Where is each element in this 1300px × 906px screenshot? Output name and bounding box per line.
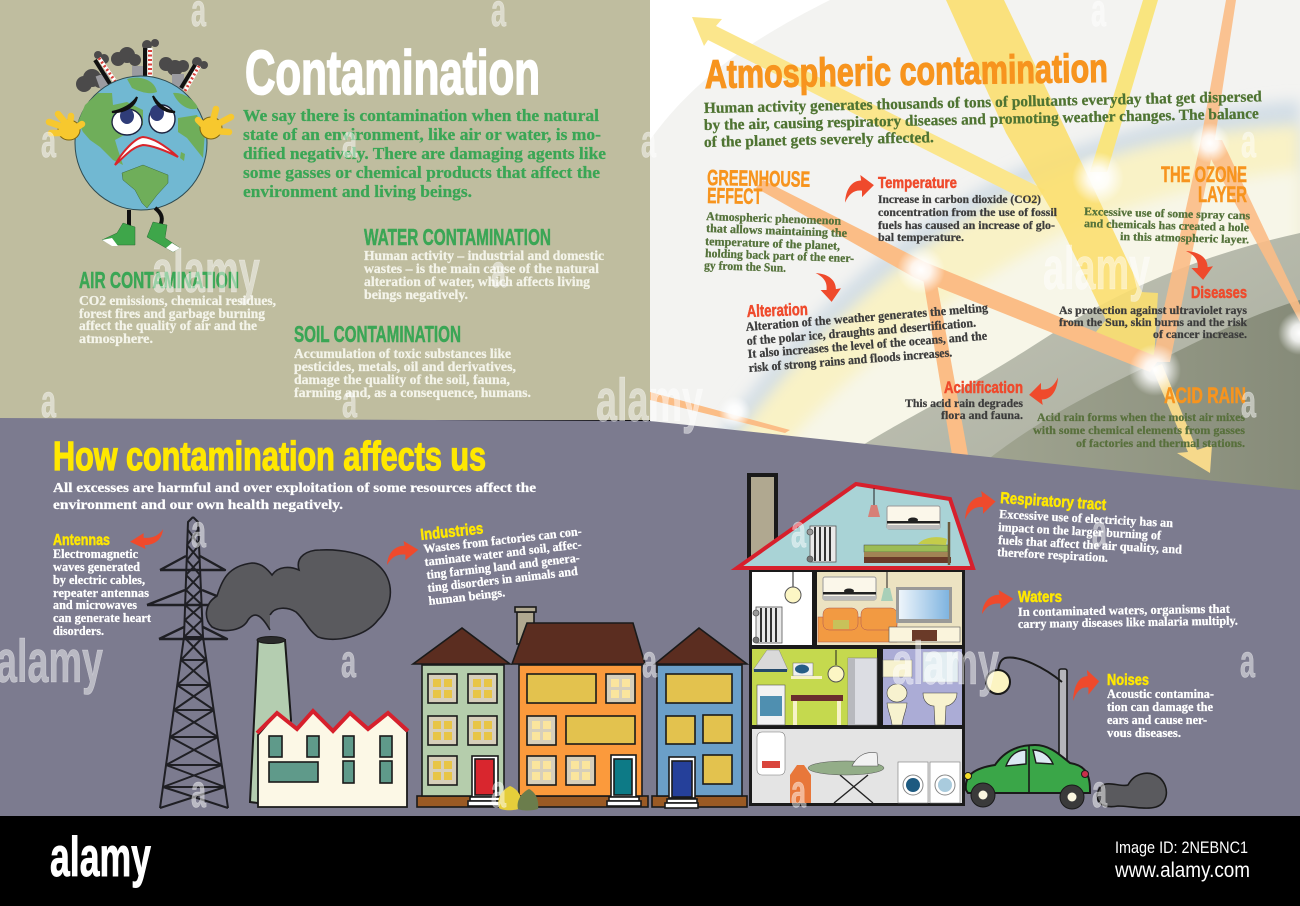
section: soil contamination: farming and, as a consequence, humans.	[294, 385, 531, 400]
section: acid rain: of factories and thermal stations.	[1076, 436, 1245, 450]
watermark: alamy stamps: a	[342, 375, 357, 427]
arrow: acid rain to acidification	[1029, 377, 1058, 405]
text block: how contamination intro: environment and our own health negatively.	[53, 498, 343, 513]
section: industries: human beings.	[428, 585, 506, 608]
logo: alamy: alamy	[50, 825, 151, 888]
icon: factory	[250, 636, 408, 807]
watermark: alamy stamps: a	[1240, 635, 1255, 687]
section: the ozone layer: and chemicals has created a hole	[1084, 218, 1249, 234]
watermark: alamy stamps: a	[41, 375, 56, 427]
section: antennas: by electric cables,	[53, 573, 145, 587]
watermark: alamy stamps: alamy	[1043, 235, 1150, 302]
arrow: waters	[982, 590, 1013, 614]
section: alteration	[745, 300, 989, 375]
arrow: industries	[387, 541, 418, 565]
section: noises: tion can damage the	[1107, 700, 1213, 714]
section: soil contamination: pesticides, metals, oil and derivatives,	[294, 359, 516, 374]
section: soil contamination: damage the quality of the soil, fauna,	[294, 372, 510, 387]
title: Contamination: Contamination	[245, 39, 540, 108]
icon: row of houses	[413, 607, 747, 808]
text block: how contamination intro: All excesses are harmful and over exploitation of some resources affect the	[53, 481, 536, 496]
section: greenhouse effect: that allows maintaining the	[706, 221, 848, 240]
section: respiratory tract: fuels that affect the air quality, and	[998, 533, 1182, 557]
image id and url	[1114, 838, 1250, 882]
section: industries: Industries	[420, 520, 484, 544]
section: antennas: Antennas	[53, 532, 110, 549]
section: the ozone layer: in this atmospheric layer.	[1120, 231, 1249, 246]
watermark: alamy stamps: a	[491, 765, 506, 817]
watermark: alamy stamps: a	[791, 505, 806, 557]
section: soil contamination	[294, 321, 531, 400]
section: industries: Wastes from factories can con-	[423, 524, 582, 556]
section: diseases: from the Sun, skin burns and the risk	[1059, 315, 1247, 329]
text block: atmospheric intro: by the air, causing respiratory diseases and promoting weather changes. The balance	[704, 105, 1259, 134]
section: the ozone layer: Excessive use of some spray cans	[1084, 206, 1251, 222]
text block: contamination intro: some gasses or chemical products that affect the	[243, 163, 600, 182]
section: greenhouse effect: gy from the Sun.	[704, 258, 786, 275]
section: water contamination: beings negatively.	[364, 287, 468, 302]
section: waters: Waters	[1018, 589, 1062, 606]
watermark: alamy stamps: alamy	[0, 628, 103, 695]
section: air contamination: atmosphere.	[79, 331, 153, 346]
section: waters: In contaminated waters, organisms that	[1018, 602, 1231, 619]
section: water contamination: Human activity – industrial and domestic	[364, 248, 604, 263]
section: water contamination: alteration of water, which affects living	[364, 274, 590, 289]
icon: car with exhaust	[964, 745, 1166, 809]
watermark: alamy stamps: a	[1241, 375, 1256, 427]
watermark: alamy stamps: a	[341, 635, 356, 687]
section: greenhouse effect: temperature of the planet,	[705, 234, 840, 253]
section: acid rain: with some chemical elements from gasses	[1033, 423, 1245, 437]
section: respiratory tract	[997, 490, 1182, 565]
section: acidification: flora and fauna.	[941, 408, 1023, 422]
section: greenhouse effect: holding back part of the ener-	[705, 246, 854, 265]
text block: contamination intro: environment and living beings.	[243, 182, 472, 201]
section: air contamination: affect the quality of air and the	[79, 318, 257, 333]
icon: sad earth character	[49, 39, 231, 252]
section: respiratory tract: Respiratory tract	[1000, 490, 1107, 514]
text block: contamination intro: dified negatively. There are damaging agents like	[243, 144, 606, 163]
section: alteration: risk of strong rains and floods increases.	[748, 345, 953, 375]
section: alteration: It also increases the level of the oceans, and the	[747, 329, 988, 361]
section: water contamination	[364, 224, 604, 302]
section: air contamination: forest fires and garbage burning	[79, 306, 265, 321]
basement appliances	[757, 732, 960, 803]
section: noises: vous diseases.	[1107, 726, 1181, 740]
section: soil contamination: SOIL CONTAMINATION	[294, 321, 461, 347]
watermark: alamy stamps: alamy	[892, 630, 999, 697]
text block: contamination intro: We say there is contamination when the natural	[243, 106, 599, 125]
watermark: alamy stamps: a	[1092, 765, 1107, 817]
section: the ozone layer: THE OZONE	[1161, 162, 1247, 187]
section: temperature: Temperature	[878, 175, 957, 192]
section: alteration: Alteration of the weather generates the melting	[745, 300, 989, 334]
section: greenhouse effect	[704, 165, 854, 275]
section: acid rain: Acid rain forms when the moist air mixes	[1037, 410, 1245, 424]
section: diseases: of cancer increase.	[1153, 327, 1247, 341]
watermark: alamy stamps: a	[641, 115, 656, 167]
watermark: alamy stamps: a	[1241, 115, 1256, 167]
watermark: alamy stamps: alamy	[152, 238, 260, 305]
section: noises: ears and cause ner-	[1107, 713, 1207, 727]
text block: atmospheric intro	[704, 88, 1262, 151]
section: temperature: Increase in carbon dioxide (CO2)	[878, 192, 1041, 206]
watermark: alamy stamps: a	[642, 635, 657, 687]
section: respiratory tract: therefore respiration.	[997, 545, 1108, 565]
section: greenhouse effect: Atmospheric phenomenon	[706, 209, 842, 228]
kitchen furniture	[753, 650, 877, 725]
section: diseases: As protection against ultraviolet rays	[1059, 303, 1247, 317]
bathroom furniture	[883, 652, 958, 725]
panel: how contamination affects us background	[0, 418, 1300, 816]
section: the ozone layer	[1084, 162, 1251, 246]
icon: garbage bags	[498, 786, 538, 810]
diagram: sun rays	[650, 0, 1300, 473]
title: Atmospheric contamination: Atmospheric contamination	[704, 47, 1108, 97]
section: antennas	[53, 532, 152, 638]
watermark: alamy stamps: a	[791, 765, 806, 817]
watermark: alamy stamps: a	[41, 115, 56, 167]
section: waters: carry many diseases like malaria multiply.	[1018, 614, 1238, 631]
section: antennas: repeater antennas	[53, 586, 149, 600]
section: industries	[420, 520, 582, 608]
section: antennas: and microwaves	[53, 598, 137, 612]
section: temperature	[878, 175, 1058, 244]
text block: atmospheric intro: of the planet gets severely affected.	[704, 129, 934, 151]
watermark: alamy stamps: a	[1092, 505, 1107, 557]
panel: atmosphere background	[650, 0, 1300, 490]
title: How contamination affects us: How contamination affects us	[53, 433, 486, 479]
section: industries: ting disorders in animals and	[427, 564, 578, 595]
image id and url: www.alamy.com	[1114, 859, 1250, 882]
icon: electric tower	[147, 517, 239, 808]
section: air contamination: AIR CONTAMINATION	[79, 267, 239, 293]
watermark: alamy stamps: a	[191, 505, 206, 557]
living room furniture	[753, 572, 960, 643]
watermark: alamy stamps: a	[191, 765, 206, 817]
text block: contamination intro: state of an environment, like air or water, is mo-	[243, 125, 601, 144]
arrow: respiratory tract	[965, 491, 996, 520]
section: greenhouse effect: GREENHOUSE	[707, 165, 810, 192]
section: alteration: Alteration	[746, 300, 808, 321]
icon: house cross-section	[737, 475, 973, 806]
section: antennas: Electromagnetic	[53, 547, 138, 561]
footer band	[0, 816, 1300, 906]
section: antennas: disorders.	[53, 624, 104, 638]
section: air contamination: CO2 emissions, chemical residues,	[79, 293, 276, 308]
section: industries: ting farming land and genera-	[426, 551, 580, 582]
section: temperature: bal temperature.	[878, 230, 964, 244]
section: alteration: of the polar ice, draughts and desertification.	[746, 316, 976, 348]
section: temperature: fuels has caused an increase of glo-	[878, 218, 1055, 232]
section: water contamination: WATER CONTAMINATION	[364, 224, 551, 250]
arrow: noises	[1073, 670, 1099, 701]
text block: atmospheric intro: Human activity generates thousands of tons of pollutants everyday that get dispersed	[704, 88, 1262, 117]
section: diseases	[1059, 283, 1247, 341]
image id and url: Image ID: 2NEBNC1	[1115, 838, 1248, 857]
text block: contamination intro	[243, 106, 606, 201]
section: noises: Acoustic contamina-	[1107, 687, 1214, 701]
section: greenhouse effect: EFFECT	[707, 183, 763, 209]
watermark: alamy stamps: a	[491, 245, 506, 297]
section: acid rain: ACID RAIN	[1164, 383, 1246, 408]
attic furniture	[807, 488, 951, 565]
arrow: antennas	[130, 529, 163, 549]
watermark: alamy stamps: a	[342, 115, 357, 167]
section: water contamination: wastes – is the main cause of the natural	[364, 261, 599, 276]
section: diseases: Diseases	[1191, 283, 1247, 302]
watermark: alamy stamps: alamy	[596, 367, 703, 434]
section: acidification: Acidification	[944, 378, 1023, 397]
section: antennas: waves generated	[53, 560, 140, 574]
section: acidification: This acid rain degrades	[905, 396, 1023, 410]
section: antennas: can generate heart	[53, 611, 152, 625]
section: the ozone layer: LAYER	[1198, 182, 1247, 207]
arrow: greenhouse to alteration	[816, 273, 841, 302]
section: respiratory tract: Excessive use of electricity has an	[999, 507, 1173, 530]
section: industries: taminate water and soil, affec-	[424, 537, 582, 569]
icon: street lamp	[986, 658, 1067, 765]
icon: factory smoke	[206, 550, 390, 639]
section: respiratory tract: impact on the larger burning of	[998, 520, 1162, 543]
arrow: greenhouse to temperature	[845, 175, 874, 203]
section: soil contamination: Accumulation of toxic substances like	[294, 346, 511, 361]
text block: how contamination intro	[53, 481, 536, 513]
section: acid rain	[1033, 383, 1246, 450]
section: noises: Noises	[1107, 672, 1149, 689]
section: temperature: concentration from the use of fossil	[878, 205, 1058, 219]
section: noises	[1107, 672, 1214, 740]
section: acidification	[905, 378, 1023, 422]
arrow: ozone to diseases	[1186, 251, 1213, 280]
panel: contamination background	[0, 0, 650, 420]
section: air contamination	[79, 267, 276, 346]
section: waters	[1018, 589, 1238, 631]
